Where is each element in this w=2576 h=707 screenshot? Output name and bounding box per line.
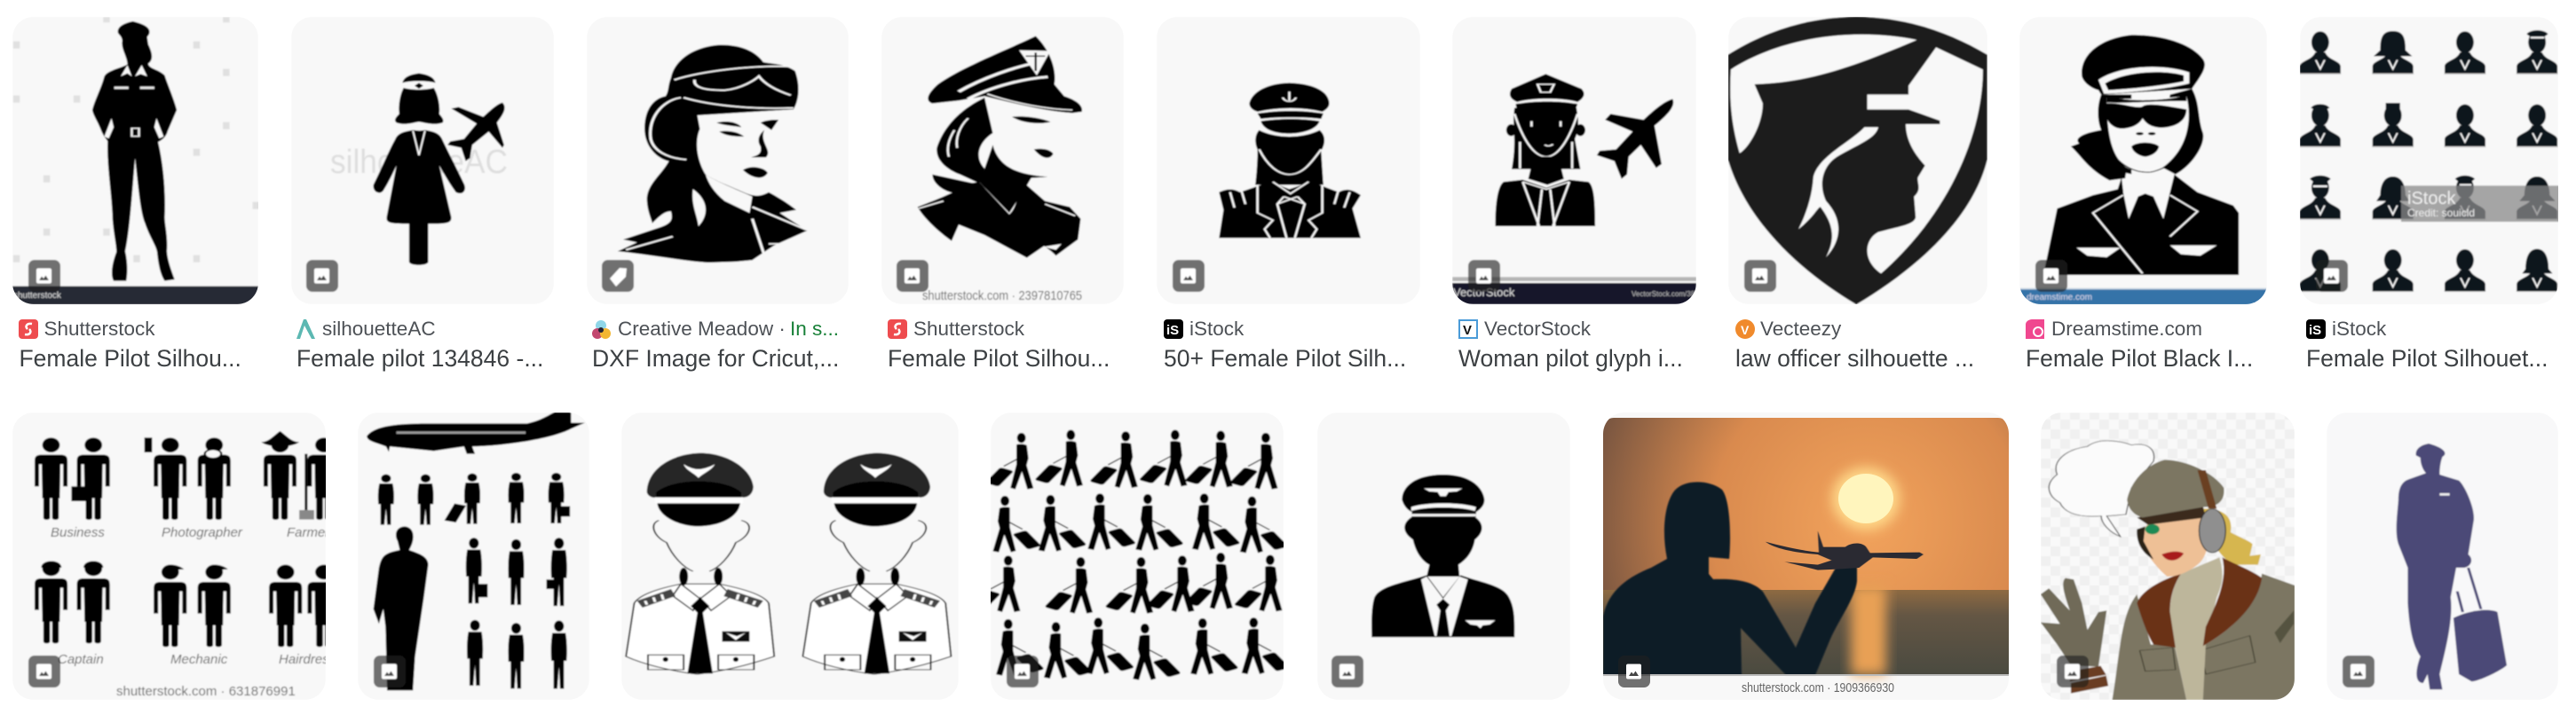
caption: result 6: Woman pilot glyph i... xyxy=(1458,345,1683,372)
icon: tag badge xyxy=(602,260,634,292)
caption: result 4: Female Pilot Silhou... xyxy=(888,345,1110,372)
icon: woman pilot with plane xyxy=(374,74,505,265)
icon: image badge xyxy=(2343,656,2375,687)
panel: result 8 female pilot with sunglasses: dreamstime.com xyxy=(2027,293,2092,302)
panel: row 2 result 1 occupation pictograms xyxy=(27,429,326,697)
caption: result 3 xyxy=(592,318,839,372)
labels: occupations: Business xyxy=(51,525,105,540)
chart: grid of busts xyxy=(2296,30,2561,307)
watermark: silhouetteAC xyxy=(330,144,508,181)
caption: result 4 xyxy=(888,318,1110,372)
icon: image badge xyxy=(374,656,406,687)
caption: result 9 xyxy=(2306,318,2548,372)
panel: row 2 result 7 pop-art aviator woman xyxy=(2041,412,2295,700)
icon: image badge xyxy=(28,656,60,687)
caption: result 2: Female pilot 134846 -... xyxy=(296,345,543,372)
labels: occupations: Mechanic xyxy=(170,652,228,667)
watermark: iStock credit xyxy=(2407,189,2475,219)
caption: result 3: Creative Meadow · xyxy=(618,318,786,340)
baseline strip xyxy=(1603,674,2009,676)
panel: row 2 result 4 travellers with luggage xyxy=(991,428,1284,688)
panel: result 8 female pilot with sunglasses xyxy=(2019,17,2269,305)
icon: aviator head xyxy=(618,45,807,263)
panel: result 6 VectorStock woman pilot glyph: VectorStock.com/38718 xyxy=(1632,290,1707,298)
watermark: iStock credit: iStock xyxy=(2407,189,2456,208)
labels: occupations xyxy=(51,525,349,699)
caption: result 5: iS xyxy=(1166,323,1179,338)
panel: result 3 aviator woman with goggles xyxy=(600,43,808,293)
caption: result 9: Female Pilot Silhouet... xyxy=(2306,345,2548,372)
icon: pop-art aviator xyxy=(2041,441,2295,700)
caption: result 7: Vecteezy xyxy=(1760,318,1842,340)
icon: woman pilot glyph with plane xyxy=(1452,74,1696,304)
icon: image badge xyxy=(1007,656,1039,687)
panel: result 2 silhouetteAC pilot and plane xyxy=(305,72,508,293)
caption: result 3: DXF Image for Cricut,... xyxy=(592,345,839,372)
labels: occupations: shutterstock.com · 631876991 xyxy=(116,684,296,699)
panel: result 1 standing female pilot silhouette: shutterstock xyxy=(13,291,62,301)
labels: occupations: Photographer xyxy=(162,525,243,540)
panel: row 2 result 8 pilot with suitcase silhouette xyxy=(2327,412,2558,700)
panel: result 4 officer profile with peaked cap xyxy=(895,35,1083,302)
photo: woman silhouette xyxy=(1603,482,1857,675)
icon: pilot with suitcase xyxy=(2397,444,2507,689)
panel: row 2 result 3 two outlined pilots xyxy=(623,452,953,676)
labels: occupations: Captain xyxy=(58,652,104,667)
panel: result 5 iStock pilot bust xyxy=(1172,82,1362,293)
panel: row 2 result 6 sunset photo with toy plane xyxy=(1603,412,2009,700)
caption: result 5: iStock xyxy=(1189,318,1245,340)
icon: shield with officer profile xyxy=(1728,17,1987,304)
photo: sun reflection xyxy=(1851,585,1886,675)
caption: result 8 xyxy=(2026,318,2253,372)
panel: result 6 VectorStock woman pilot glyph xyxy=(1452,73,1696,304)
icon: image badge xyxy=(897,260,928,292)
caption: result 5: 50+ Female Pilot Silh... xyxy=(1164,345,1406,372)
panel: result 7 law officer shield xyxy=(1728,17,1987,304)
icon: image badge xyxy=(2057,656,2089,687)
icon: standing pilot xyxy=(0,17,264,304)
panel: result 9 iStock grid of busts xyxy=(2300,28,2558,293)
caption: result 2 xyxy=(296,318,543,372)
caption: result 1: Female Pilot Silhou... xyxy=(20,345,241,372)
photo: toy plane xyxy=(1766,530,1924,570)
watermark: iStock credit: Credit: souicld xyxy=(2407,207,2475,219)
icon: officer profile xyxy=(918,36,1082,258)
labels: occupations: Hairdresser xyxy=(279,652,349,667)
caption: result 8: Female Pilot Black I... xyxy=(2026,345,2253,372)
caption: result 6 xyxy=(1458,318,1683,372)
icon: image badge xyxy=(1744,260,1776,292)
icon: image badge xyxy=(2035,260,2067,292)
icon: pilot left and right xyxy=(626,453,951,674)
icon: image badge xyxy=(28,260,60,292)
caption: result 1 xyxy=(19,318,241,372)
icon: image badge xyxy=(2316,260,2348,292)
panel: row 2 result 5 pilot bust with wings xyxy=(1317,412,1570,700)
icon: image badge xyxy=(1468,260,1500,292)
caption: result 7: V xyxy=(1741,323,1750,337)
icon: pilot bust xyxy=(1219,82,1361,238)
panel: row 2 result 2 airliner and crew silhouettes xyxy=(358,412,589,700)
photo: sun xyxy=(1832,467,1900,530)
caption: result 4: Shutterstock xyxy=(913,318,1025,340)
icon: image badge xyxy=(1173,260,1205,292)
watermark: shutterstock id: shutterstock.com · 1909366930 xyxy=(1742,680,1894,695)
photo: sunset sky xyxy=(1603,418,2009,675)
icon: image badge xyxy=(1331,656,1363,687)
icon: airliner and crew xyxy=(367,412,585,690)
icon: image badge xyxy=(306,260,338,292)
photo: sea xyxy=(1603,590,2009,675)
icon: pilot with sunglasses xyxy=(2019,35,2269,305)
caption: result 2: silhouetteAC xyxy=(322,318,436,340)
caption: result 6: V xyxy=(1463,323,1472,338)
caption: result 6: VectorStock xyxy=(1484,318,1592,340)
caption: result 7: law officer silhouette ... xyxy=(1735,345,1974,372)
caption: result 9: iS xyxy=(2309,323,2321,338)
caption: result 7 xyxy=(1735,318,1974,372)
caption: result 3: In s... xyxy=(790,318,839,340)
panel: result 1 standing female pilot silhouette xyxy=(0,17,264,304)
chart: rows of walkers xyxy=(972,430,1290,680)
caption: result 5 xyxy=(1164,318,1406,372)
icon: pilot bust with wings xyxy=(1371,475,1514,637)
caption: result 1: Shutterstock xyxy=(44,318,155,340)
caption: result 8: Dreamstime.com xyxy=(2051,318,2202,340)
icon: image badge xyxy=(1618,656,1650,687)
labels: occupations: Farmer xyxy=(287,525,330,540)
caption: result 9: iStock xyxy=(2332,318,2387,340)
watermark: shutterstock id: shutterstock.com · 2397810765 xyxy=(922,288,1082,303)
icon: stick figures xyxy=(35,431,341,647)
panel: result 6 VectorStock woman pilot glyph: VectorStock xyxy=(1453,286,1515,299)
